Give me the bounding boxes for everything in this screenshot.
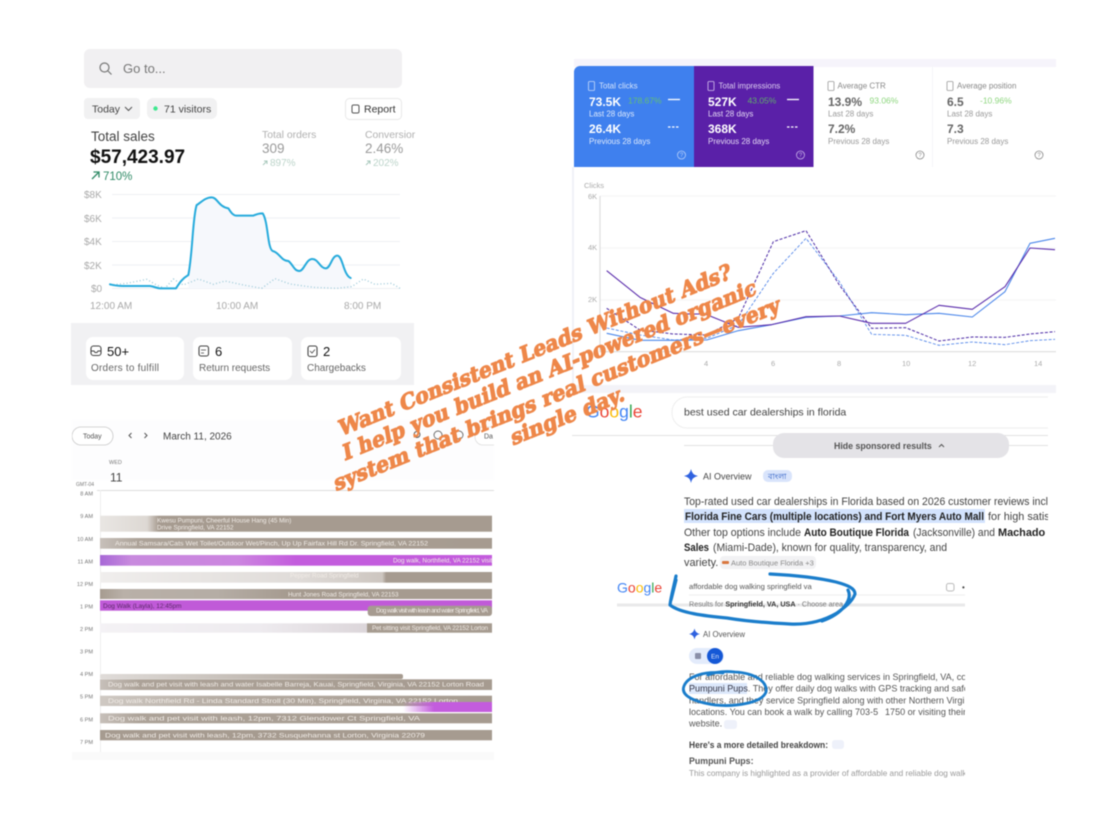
language toggle: En [711, 654, 719, 660]
hour labels: 11 AM [78, 560, 93, 566]
hour labels: 7 PM [80, 740, 93, 746]
hour labels: 10 AM [77, 537, 93, 543]
event blocks: Drive Springfield, VA 22152 [157, 524, 234, 532]
tile: chargebacks: Chargebacks [307, 363, 366, 374]
summary tiles strip [71, 323, 414, 385]
line chart: sales [84, 190, 400, 312]
hour labels: 4 PM [80, 672, 93, 678]
headline line 1: Want Consistent Leads Without Ads? [336, 259, 733, 443]
total sales figure [90, 129, 185, 183]
metric card: total impressions: Last 28 days [708, 110, 753, 118]
metric card: average CTR: 93.06% [870, 96, 899, 106]
hour labels: 12 PM [77, 582, 93, 588]
AI overview heading [689, 628, 745, 640]
total sales figure: 710% [103, 171, 132, 183]
line chart: clicks: 2 [638, 359, 642, 368]
line chart: sales: $2K [84, 261, 102, 272]
AI overview text: 1750 or visiting their [885, 707, 966, 717]
metric card: average CTR [828, 82, 924, 159]
line chart: clicks: 4K [588, 243, 597, 252]
metric card: average position: ? [1037, 153, 1041, 159]
day header: GMT-04 [76, 482, 94, 488]
event blocks: Dog walk and pet visit with leash, 12pm, 3732 Susquehanna st Lorton, Virginia 22079 [105, 732, 426, 740]
headline line 2: I help you build an AI-powered organic [341, 275, 758, 467]
breakdown section: This company is highlighted as a provider of affordable and reliable dog walking [689, 769, 978, 778]
metric card: total impressions: ? [799, 153, 803, 159]
search bar: Go to... [123, 61, 166, 76]
AI overview text: Sales [684, 542, 709, 554]
AI overview text: For affordable and reliable dog walking services in Springfield, VA, consider [689, 672, 991, 682]
metric card: average CTR: 7.2% [828, 122, 856, 136]
hide sponsored pill [773, 433, 1009, 458]
event blocks: Dog Walk (Layla), 12:45pm [103, 603, 182, 610]
event blocks: Hunt Jones Road Springfield, VA 22153 [288, 592, 399, 598]
metric card: total clicks [574, 66, 694, 167]
line chart: clicks: 10 [902, 359, 910, 368]
hide sponsored pill: Hide sponsored results [834, 441, 932, 451]
date filter pill [84, 98, 140, 119]
tile: orders to fulfill [86, 337, 184, 380]
event blocks: Dog walk and pet visit with leash, 12pm, 7312 Glendower Ct Springfield, VA [108, 716, 421, 722]
tile: chargebacks [301, 337, 401, 380]
calendar toolbar: March 11, 2026 [163, 432, 232, 442]
metric card: total clicks: 178.67% [628, 96, 662, 106]
headline line 3: system that brings real customers—every [332, 292, 782, 497]
event blocks: Pet sitting visit Springfield, VA 22152 Lorton [372, 625, 488, 632]
AI overview text: Pumpuni Pups. They offer daily dog walks with GPS tracking and safe [689, 684, 969, 694]
AI overview text: for high satis [988, 511, 1050, 523]
AI overview text: (Jacksonville) and [913, 527, 995, 539]
event blocks: Dog walk Northfield Rd - Linda Standard Stroll (30 Min), Springfield, Virginia, VA 22152 Lorton [108, 698, 459, 705]
line chart: sales: $0 [91, 284, 103, 295]
AI overview text: Auto Boutique Florida +3 [731, 558, 814, 568]
panel: google search dog walking [617, 582, 966, 778]
hour labels: 9 AM [80, 514, 93, 520]
metric card: average CTR: Last 28 days [828, 110, 873, 118]
metric card: total clicks: ? [680, 153, 684, 159]
AI overview heading: বাংলা [767, 472, 787, 481]
AI overview text: Machado A [998, 527, 1056, 539]
line chart: sales: $8K [84, 190, 102, 201]
total orders figure: 309 [262, 141, 285, 156]
report button: Report [364, 104, 396, 116]
total orders figure: Total orders [262, 130, 316, 141]
AI overview text: Florida Fine Cars (multiple locations) and Fort Myers Auto Mall [685, 511, 984, 523]
line chart: clicks: 14 [1034, 359, 1042, 368]
report button [346, 98, 402, 120]
AI overview text: handlers, and they service Springfield along with other Northern Virginia [689, 696, 977, 706]
metric card: total impressions: 368K [708, 122, 737, 136]
conversion figure [365, 130, 416, 169]
line chart: sales: 8:00 PM [344, 301, 381, 312]
search query: affordable dog walking springfield va [689, 582, 812, 591]
AI overview text [684, 496, 1056, 569]
search bar [84, 49, 402, 88]
line chart: clicks: 4 [704, 359, 708, 368]
calendar toolbar [72, 427, 505, 445]
AI overview text: Auto Boutique Florida [804, 527, 910, 539]
event blocks: Dog walk visit with leash and water Springfield, VA [376, 608, 489, 614]
AI overview heading: AI Overview [703, 472, 752, 482]
hour labels: 6 PM [80, 718, 93, 724]
metric card: total clicks: 26.4K [589, 122, 621, 136]
total sales figure: $57,423.97 [90, 147, 185, 168]
date filter pill: Today [92, 104, 121, 116]
metric card: average CTR: 13.9% [828, 95, 862, 109]
search box [672, 397, 1092, 428]
total orders figure: 897% [270, 158, 296, 169]
line chart: clicks: 2K [588, 295, 597, 304]
AI overview text: Top-rated used car dealerships in Florida based on 2026 customer reviews incl [684, 496, 1048, 508]
hour labels: 5 PM [80, 694, 93, 700]
metric card: average position [932, 66, 1043, 167]
breakdown section: Pumpuni Pups: [689, 756, 754, 766]
metric card: average position: Previous 28 days [947, 137, 1008, 146]
panel: google search car dealerships [572, 397, 1092, 569]
panel: sales dashboard [71, 49, 416, 385]
event blocks: Annual Samsara/Cats Wet Toilet/Outdoor Wet/Pinch, Up Up Fairfax Hill Rd Dr. Springfield, VA 22152 [115, 540, 429, 548]
conversion figure: 2.46% [365, 141, 403, 156]
metric card: average CTR: Previous 28 days [828, 137, 889, 146]
hour labels [77, 492, 93, 746]
conversion figure: Conversior [365, 130, 416, 141]
metric card: average CTR: Average CTR [838, 82, 886, 90]
line chart: clicks: 6 [771, 359, 775, 368]
breakdown section [689, 740, 978, 778]
tile: return requests [193, 337, 292, 380]
search box: best used car dealerships in florida [684, 406, 846, 418]
metric card: average position: 7.3 [947, 122, 964, 136]
panel: calendar [72, 420, 505, 760]
day header: 11 [110, 470, 123, 484]
event blocks: Pepper Road Springfield [290, 572, 359, 580]
AI overview text: (Miami-Dade), known for quality, transparency, and [713, 542, 947, 554]
hour labels: 3 PM [80, 650, 93, 656]
day header: WED [109, 460, 122, 466]
metric card: total clicks: Last 28 days [589, 110, 634, 118]
visitors pill: 71 visitors [164, 104, 211, 116]
results location: Results for Springfield, VA, USA · Choose area [689, 600, 843, 608]
line chart: sales: $4K [84, 237, 102, 248]
calendar toolbar: Da [484, 434, 493, 440]
metric card: total impressions: 43.05% [748, 96, 777, 106]
tile: orders to fulfill: Orders to fulfill [91, 363, 159, 374]
tile: return requests: Return requests [199, 363, 270, 374]
hour labels: 8 AM [80, 492, 93, 498]
metric card: total clicks: Total clicks [599, 82, 638, 90]
AI overview text [688, 672, 991, 729]
search query [689, 582, 965, 595]
metric card: average position: Average position [957, 82, 1016, 90]
event blocks: Dog walk, Northfield, VA 22152 visit [393, 558, 493, 564]
line chart: sales: 10:00 AM [216, 301, 258, 312]
day header [76, 460, 494, 752]
tile: orders to fulfill: 50+ [107, 344, 129, 359]
metric card: total impressions [694, 66, 814, 167]
metric card: average position: Last 28 days [947, 110, 992, 118]
hour labels: 2 PM [80, 627, 93, 633]
line chart: sales: $6K [84, 214, 102, 225]
visitors pill [147, 98, 217, 119]
metric card: average position: -10.96% [980, 96, 1012, 106]
AI overview text: Other top options include [684, 527, 801, 539]
annotation: blue circle around Pumpuni Pups [683, 672, 766, 705]
conversion figure: 202% [373, 158, 399, 169]
language toggle [689, 648, 724, 664]
hour labels: 1 PM [80, 604, 93, 610]
total orders figure [262, 130, 316, 169]
AI overview text: website. [688, 718, 722, 728]
tile: chargebacks: 2 [323, 344, 330, 359]
metric card: total impressions: Previous 28 days [708, 137, 769, 146]
breakdown section: Here's a more detailed breakdown: [689, 740, 828, 750]
calendar toolbar: Today [83, 434, 102, 440]
line chart: clicks [584, 181, 1056, 368]
tile: return requests: 6 [215, 344, 222, 359]
line chart: clicks: Clicks [584, 181, 604, 190]
metric card: average CTR: ? [918, 153, 922, 159]
total sales figure: Total sales [91, 129, 155, 144]
metric card: total clicks: 73.5K [589, 95, 621, 109]
line chart: clicks: 8 [837, 359, 841, 368]
google logo small: Google [617, 580, 662, 596]
panel: search console performance [572, 59, 1056, 393]
event blocks [100, 516, 493, 740]
metric card: total impressions: 527K [708, 95, 737, 109]
event blocks: Kwesu Pumpuni, Cheerful House Hang (45 Min) [157, 518, 291, 524]
AI overview text: variety. [684, 557, 718, 569]
event blocks: Dog walk and pet visit with leash and water Isabelle Barreja, Kauai, Springfield, Virginia, VA 22152 Lorton Road [108, 682, 485, 688]
headline line 4: single day. [509, 381, 627, 451]
AI overview heading [684, 469, 792, 483]
metric card: total impressions: Total impressions [718, 82, 780, 90]
annotation: blue circle around search query [670, 574, 855, 624]
headline banner [309, 247, 796, 519]
google logo: Google [586, 402, 642, 422]
metric card: total clicks: Previous 28 days [589, 137, 650, 146]
AI overview text: locations. You can book a walk by calling 703-5 [689, 707, 878, 717]
line chart: clicks: 12 [968, 359, 976, 368]
metric card: average position: 6.5 [947, 95, 964, 109]
AI overview heading: AI Overview [703, 630, 745, 639]
line chart: clicks: 6K [588, 192, 597, 201]
search query: • [962, 583, 965, 592]
line chart: sales: 12:00 AM [90, 301, 132, 312]
